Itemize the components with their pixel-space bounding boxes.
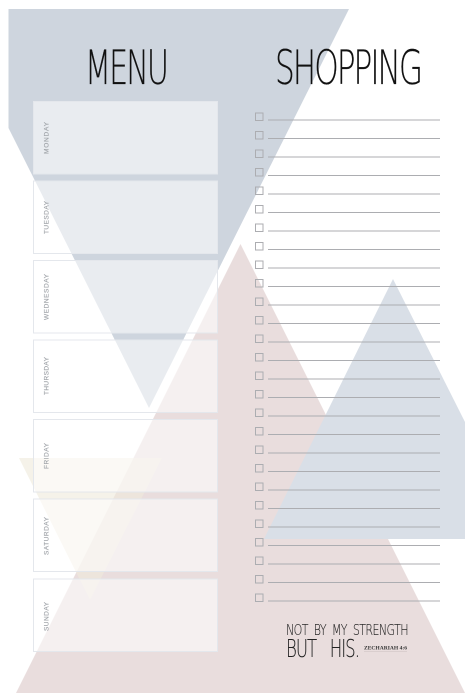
panel: tuesday: TUESDAY [44, 200, 50, 234]
panel: friday [34, 420, 218, 492]
right blue triangle [264, 279, 465, 539]
panel: wednesday: WEDNESDAY [44, 273, 50, 320]
reference underline [364, 650, 407, 652]
panel: thursday [34, 340, 218, 412]
shopping checklist: 27 checkboxes and rules [256, 113, 440, 602]
scripture reference: ZECHARIAH 4:6 [364, 646, 407, 652]
panel: tuesday [34, 181, 218, 254]
panel: thursday: THURSDAY [44, 356, 50, 395]
panel: saturday [34, 499, 218, 572]
panel: monday: MONDAY [44, 121, 50, 154]
panel: menu days [34, 102, 218, 652]
heading: menu: MENU [85, 41, 167, 96]
writing rules [268, 120, 440, 601]
panel: sunday [34, 579, 218, 652]
large pink triangle [16, 244, 465, 693]
panel: saturday: SATURDAY [44, 516, 50, 555]
panel: monday [34, 102, 218, 174]
panel: friday: FRIDAY [44, 442, 50, 469]
pale yellow inverted triangle [19, 458, 162, 600]
panel: sunday: SUNDAY [44, 601, 50, 631]
quote line one: NOT BY MY STRENGTH [286, 621, 408, 639]
quote block [286, 621, 408, 663]
checkboxes [256, 113, 263, 602]
large blue inverted triangle [8, 9, 349, 408]
panel: wednesday [34, 260, 218, 333]
quote line two: BUT HIS. [286, 634, 359, 663]
